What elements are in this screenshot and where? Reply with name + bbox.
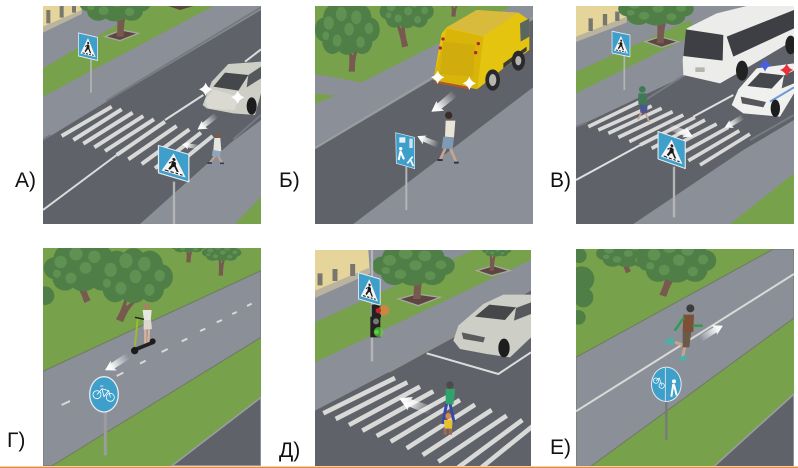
panel: scene B, garbage truck reversing in residential zone <box>315 6 533 224</box>
grass strip <box>43 6 213 97</box>
bike path <box>43 271 261 466</box>
path centre dashes <box>62 304 252 405</box>
panel: scene D, scooter rider on a bike path <box>43 248 261 466</box>
sign: residential zone <box>396 133 415 210</box>
bike and pedestrian path <box>576 249 794 467</box>
arrow: pedestrian direction <box>182 141 201 152</box>
road centre line <box>576 95 733 180</box>
car <box>203 62 261 115</box>
scooter rider <box>131 304 156 354</box>
garbage truck <box>433 10 529 91</box>
pedestrian <box>638 86 649 122</box>
curb <box>315 17 533 148</box>
road <box>315 20 533 224</box>
arrow: pedestrian direction <box>396 392 434 418</box>
trees <box>36 239 241 324</box>
grass <box>315 6 512 104</box>
icon: hazard lights <box>431 71 476 90</box>
crosswalk <box>588 102 750 165</box>
tree <box>79 0 193 41</box>
panel: scene F, roller skater on a divided path <box>576 249 794 466</box>
icon: hazard lights <box>199 83 244 104</box>
crosswalk <box>323 378 533 467</box>
panel: scene C, police car with flashers near crosswalk <box>576 6 794 224</box>
arrow: pedestrian direction <box>667 121 695 141</box>
sign: divided cycle and pedestrian path <box>651 367 682 440</box>
sign: bicycle path <box>89 376 119 455</box>
sign: near crosswalk <box>158 145 190 224</box>
tree <box>618 0 694 47</box>
label: А): А) <box>15 169 36 192</box>
curb <box>43 7 261 139</box>
lower grass <box>730 173 794 224</box>
road <box>43 10 261 224</box>
sign: far crosswalk <box>612 31 630 90</box>
traffic light and sign <box>358 250 389 361</box>
label: Г): Г) <box>7 429 25 452</box>
path dividing line <box>576 274 794 411</box>
parking lines <box>427 352 531 374</box>
sign: near crosswalk <box>658 131 686 217</box>
lower grass <box>235 197 261 224</box>
panel: scene E, adult and child on a regulated crosswalk <box>315 250 531 466</box>
arrow: police car direction <box>723 113 746 132</box>
curb <box>576 76 794 140</box>
label: Е): Е) <box>550 436 571 459</box>
road corner <box>713 394 794 467</box>
road centre line <box>43 49 261 210</box>
roller skater <box>665 304 703 361</box>
building <box>315 250 370 298</box>
trees <box>315 0 475 72</box>
bus <box>683 6 796 83</box>
road corner <box>172 397 261 466</box>
pedestrian <box>437 112 459 163</box>
road <box>576 23 794 224</box>
grass strip <box>576 20 697 93</box>
road <box>315 291 531 466</box>
trees <box>569 236 716 325</box>
pedestrian <box>207 133 224 163</box>
adult and child pedestrians <box>443 381 455 435</box>
crosswalk <box>62 107 213 173</box>
building <box>576 6 627 42</box>
arrow: truck direction <box>428 89 459 117</box>
arrow: car direction <box>195 112 220 134</box>
label: В): В) <box>550 169 571 192</box>
icon: blue and red flashers <box>758 58 793 77</box>
arrow: scooter direction <box>102 351 132 376</box>
label: Д): Д) <box>279 439 300 462</box>
police car <box>732 63 794 117</box>
curb <box>388 334 457 371</box>
grass strip <box>315 250 531 362</box>
sign: far crosswalk <box>78 32 98 93</box>
label: Б): Б) <box>279 169 300 192</box>
arrow: pedestrian direction <box>415 132 440 150</box>
car <box>453 295 531 357</box>
trees <box>372 243 511 306</box>
arrow: skater direction <box>697 320 725 343</box>
panel: scene A, car reversing near crosswalk <box>43 6 261 224</box>
building <box>43 6 82 33</box>
